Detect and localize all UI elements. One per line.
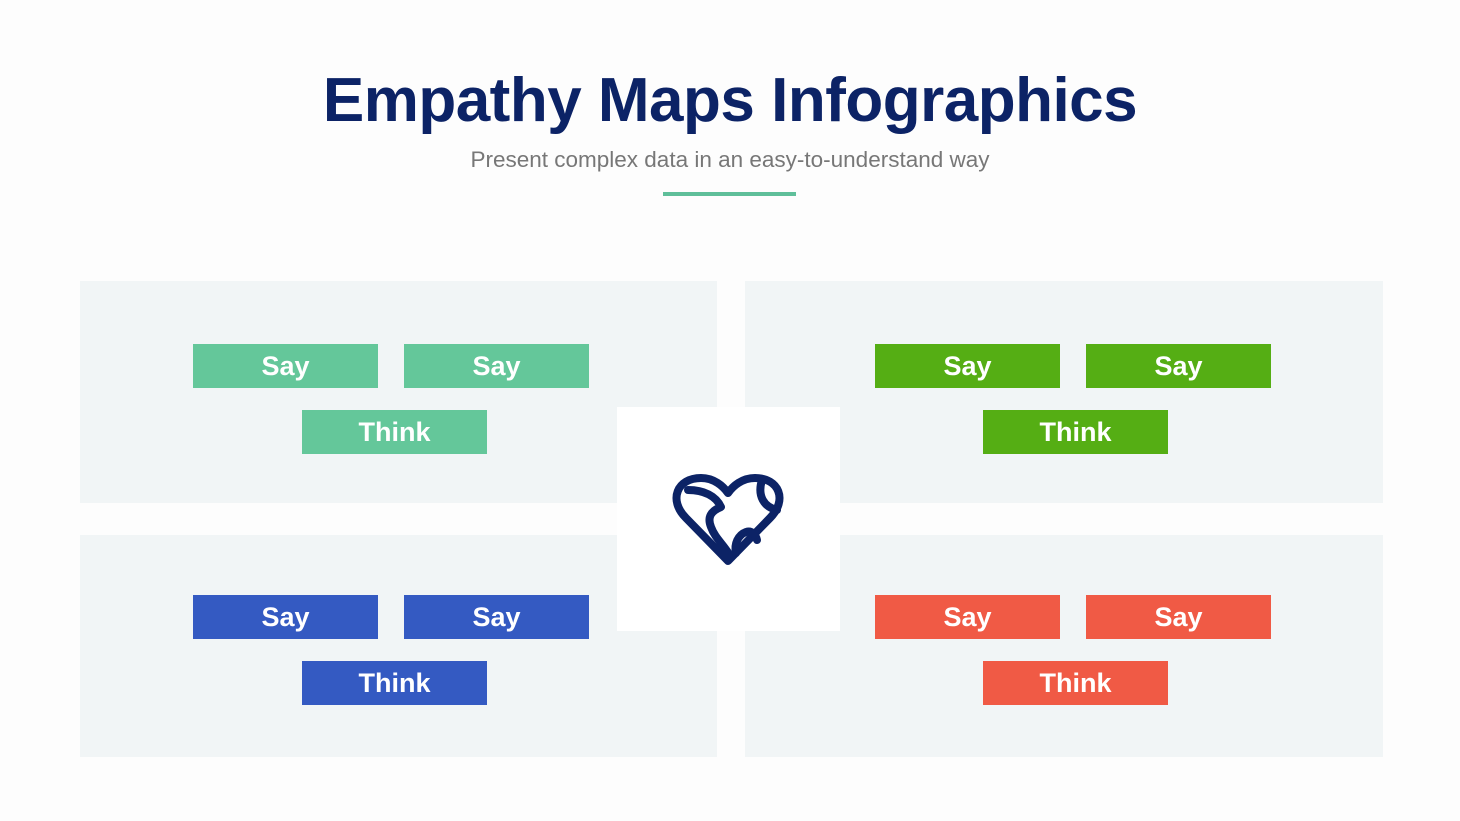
title: Empathy Maps Infographics: [323, 66, 1137, 135]
button: think: [983, 410, 1168, 454]
button: say: [1086, 344, 1271, 388]
buttons: top-left: [193, 344, 589, 454]
accent underline: [663, 192, 796, 196]
buttons: bottom-left: [193, 595, 589, 705]
button: say: Say: [1154, 351, 1203, 381]
button: say: [193, 595, 378, 639]
button: think: Think: [1040, 417, 1112, 447]
button: say: Say: [261, 602, 310, 632]
button: say: Say: [1154, 602, 1203, 632]
button: say: [404, 344, 589, 388]
panel: top-left: [80, 281, 717, 503]
button: say: Say: [261, 351, 310, 381]
button: say: [1086, 595, 1271, 639]
button: say: [875, 344, 1060, 388]
button: say: Say: [472, 602, 521, 632]
button: think: [302, 661, 487, 705]
button: think: Think: [1040, 668, 1112, 698]
icon: globe heart: [672, 474, 784, 565]
subtitle: Present complex data in an easy-to-understand way: [470, 147, 990, 172]
button: say: Say: [943, 602, 992, 632]
button: think: Think: [358, 668, 430, 698]
button: say: Say: [472, 351, 521, 381]
panel: top-right: [745, 281, 1383, 503]
buttons: bottom-right: [875, 595, 1271, 705]
button: think: Think: [358, 417, 430, 447]
button: say: [875, 595, 1060, 639]
button: say: Say: [943, 351, 992, 381]
panel: bottom-left: [80, 535, 717, 757]
center square: [617, 407, 840, 631]
button: say: [193, 344, 378, 388]
button: think: [302, 410, 487, 454]
button: say: [404, 595, 589, 639]
buttons: top-right: [875, 344, 1271, 454]
panel: bottom-right: [745, 535, 1383, 757]
button: think: [983, 661, 1168, 705]
